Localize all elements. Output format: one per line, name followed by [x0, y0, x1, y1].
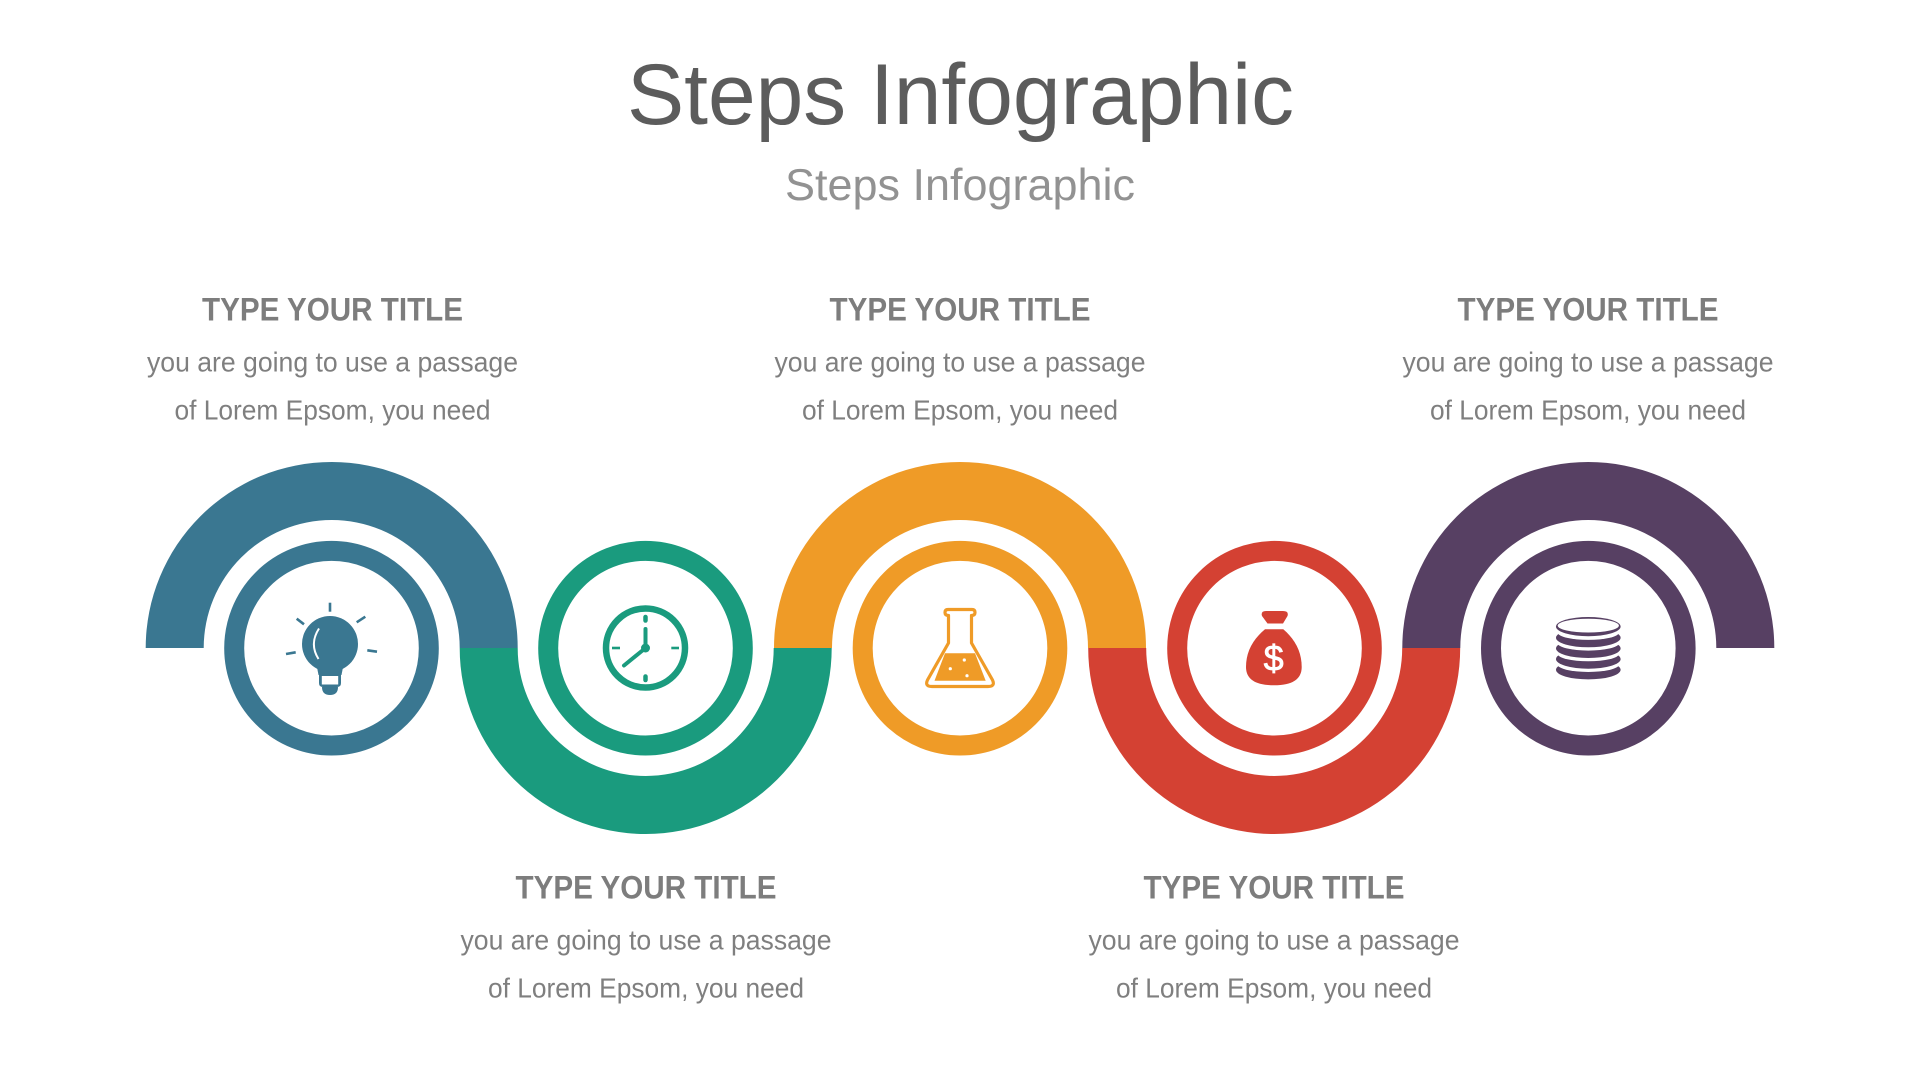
ring: step 5 — [1491, 551, 1686, 746]
icon: flask — [927, 610, 993, 686]
subtitle: Steps Infographic — [785, 161, 1135, 210]
text block: step 5: of Lorem Epsom, you need — [1430, 394, 1746, 425]
text block: step 4 — [1088, 870, 1460, 1003]
ring: step 1 — [234, 551, 429, 746]
title: Steps Infographic — [627, 47, 1294, 143]
text block: step 4: TYPE YOUR TITLE — [1144, 870, 1404, 906]
text block: step 5 — [1402, 292, 1774, 425]
icon: money bag — [1246, 611, 1302, 685]
ring: step 3 — [863, 551, 1057, 746]
text block: step 2: you are going to use a passage — [460, 925, 832, 956]
icon: coin stack — [1556, 617, 1621, 679]
ring: step 4 — [1177, 551, 1372, 746]
icon: light bulb — [286, 603, 377, 695]
text block: step 2 — [460, 870, 832, 1003]
arc: step 5 purple — [1402, 462, 1774, 648]
text block: step 4: you are going to use a passage — [1088, 925, 1460, 956]
text block: step 2: TYPE YOUR TITLE — [516, 870, 776, 906]
icon: clock — [606, 608, 685, 688]
ring: step 2 — [548, 551, 743, 746]
text block: step 2: of Lorem Epsom, you need — [488, 972, 804, 1003]
text block: step 1 — [147, 292, 518, 425]
arc: step 3 orange — [774, 462, 1146, 648]
text block: step 1: of Lorem Epsom, you need — [174, 394, 490, 425]
text block: step 3: you are going to use a passage — [774, 347, 1146, 378]
text block: step 1: TYPE YOUR TITLE — [202, 292, 463, 328]
text block: step 5: you are going to use a passage — [1402, 347, 1774, 378]
icon: money bag: $ — [1264, 638, 1284, 678]
arc: step 4 red — [1088, 648, 1460, 834]
text block: step 3: of Lorem Epsom, you need — [802, 394, 1118, 425]
text block: step 3 — [774, 292, 1146, 425]
text block: step 4: of Lorem Epsom, you need — [1116, 972, 1432, 1003]
text block: step 3: TYPE YOUR TITLE — [830, 292, 1090, 328]
arc: step 2 green — [460, 648, 832, 834]
text block: step 5: TYPE YOUR TITLE — [1458, 292, 1718, 328]
text block: step 1: you are going to use a passage — [147, 347, 518, 378]
arc: step 1 blue — [146, 462, 518, 648]
